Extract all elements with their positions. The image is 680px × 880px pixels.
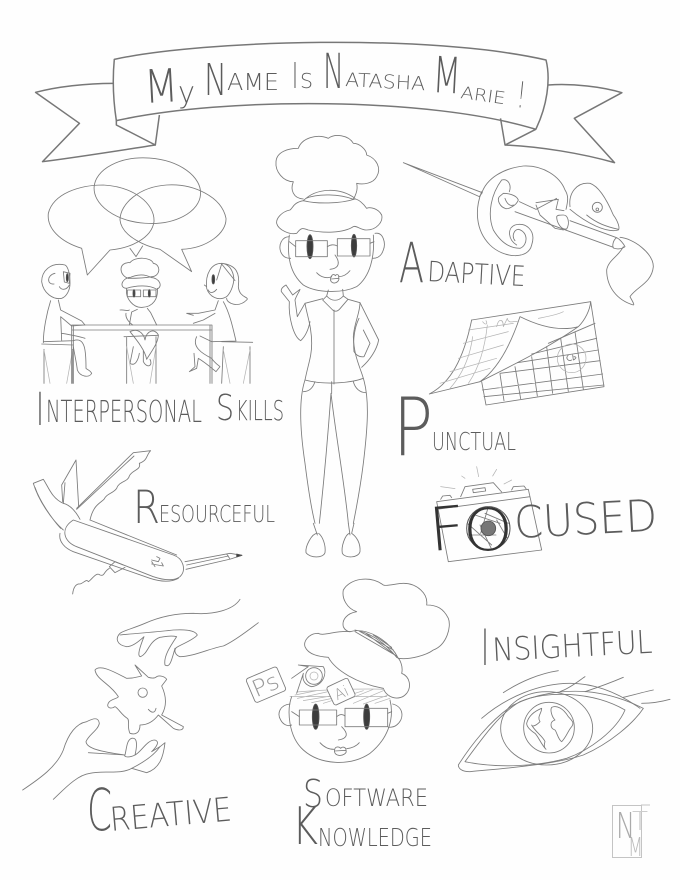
label: focused: CUSED — [513, 491, 658, 549]
collar and torso — [327, 289, 343, 296]
signature monogram — [612, 805, 650, 863]
label: adaptive: DAPTIVE — [427, 255, 526, 293]
trousers — [301, 380, 315, 523]
face — [289, 697, 391, 762]
label: focused: F — [426, 493, 468, 566]
forehead hatching — [290, 689, 390, 704]
label: creative — [87, 776, 233, 844]
signature monogram: N — [616, 806, 635, 847]
title: ARIE — [459, 83, 507, 109]
person right — [206, 263, 247, 304]
label: punctual — [393, 381, 516, 474]
icon: head with software knowledge — [246, 579, 449, 762]
label: creative: REATIVE — [108, 789, 233, 839]
title: ATASHA — [345, 69, 426, 95]
body — [65, 520, 183, 580]
glasses and eyes — [307, 235, 313, 259]
icon: swiss army knife — [33, 451, 242, 594]
hair — [305, 631, 409, 698]
label: adaptive: A — [399, 231, 424, 295]
folded tool — [33, 479, 80, 530]
label: software knowledge: OFTWARE — [325, 784, 428, 812]
title: N — [204, 55, 227, 106]
head — [570, 183, 619, 231]
label: interpersonal skills: KILLS — [236, 394, 284, 427]
software logos text: Ps — [248, 668, 283, 703]
title: M — [143, 58, 180, 114]
title: M — [431, 46, 462, 105]
label: insightful — [481, 619, 653, 677]
label: focused: O — [463, 496, 513, 564]
icon: camera with focused lens — [437, 467, 542, 562]
hair — [277, 199, 382, 234]
label: punctual: P — [393, 381, 433, 474]
nose and mouth — [320, 727, 359, 749]
shoes — [306, 523, 325, 557]
panel: interpersonal skills illustration — [42, 154, 253, 383]
person left — [42, 264, 70, 299]
upper hand — [117, 599, 240, 666]
icon: chameleon on paint brush — [403, 163, 653, 305]
label: adaptive — [399, 231, 526, 295]
label: resourceful: ESOURCEFUL — [159, 502, 275, 528]
label: punctual: UNCTUAL — [432, 427, 516, 456]
gripping feet — [498, 193, 518, 209]
lower hand — [23, 719, 165, 799]
label: resourceful — [133, 481, 275, 534]
cross emblem — [152, 557, 163, 567]
title: ! — [515, 75, 527, 117]
label: focused — [426, 491, 658, 566]
table — [72, 325, 212, 383]
face — [288, 235, 374, 291]
small blade — [62, 460, 79, 507]
label: insightful: NSIGHTFUL — [491, 623, 653, 669]
label: software knowledge: NOWLEDGE — [318, 823, 432, 852]
left arm, waving — [281, 285, 310, 341]
serrated blade — [77, 451, 151, 520]
label: interpersonal skills: NTERPERSONAL — [46, 395, 202, 430]
software logos text: Ai — [331, 682, 352, 704]
icon: eye with globe — [458, 671, 670, 772]
signature monogram: T — [632, 807, 648, 837]
tilted hat — [343, 579, 449, 659]
signature monogram: M — [628, 833, 643, 863]
icon: Illustrator tile — [326, 678, 356, 706]
label: insightful: I — [481, 619, 489, 677]
title: I — [292, 56, 298, 97]
title — [143, 44, 527, 117]
right arm on hip — [354, 303, 379, 367]
label: software knowledge — [292, 772, 432, 857]
person centre — [121, 258, 159, 278]
icon: Photoshop tile — [246, 666, 286, 703]
label: software knowledge: S — [303, 772, 323, 816]
nose and mouth — [317, 255, 350, 278]
label: interpersonal skills — [36, 383, 284, 436]
title: S — [300, 69, 313, 93]
label: interpersonal skills: S — [216, 388, 234, 429]
central figure: Natasha — [276, 136, 384, 557]
label: creative: C — [87, 776, 112, 844]
glasses and eyes — [312, 704, 319, 729]
brush — [403, 163, 482, 197]
icon: hands shaping a creative form — [23, 599, 258, 799]
pencil — [185, 553, 242, 569]
chef hat — [276, 136, 379, 199]
title: y — [178, 76, 195, 111]
body and tail — [482, 166, 568, 209]
banner ribbon — [36, 42, 622, 163]
label: software knowledge: K — [292, 797, 318, 857]
label: resourceful: R — [133, 481, 160, 534]
corkscrew — [73, 562, 125, 594]
blob form — [95, 665, 183, 734]
icon: calendar with curled page — [429, 302, 604, 405]
software logos text — [248, 668, 352, 704]
icon: Blender logo — [292, 665, 325, 693]
title: N — [323, 44, 344, 100]
label: interpersonal skills: I — [36, 383, 44, 436]
title: AME — [227, 70, 279, 96]
speech bubbles — [92, 154, 203, 227]
